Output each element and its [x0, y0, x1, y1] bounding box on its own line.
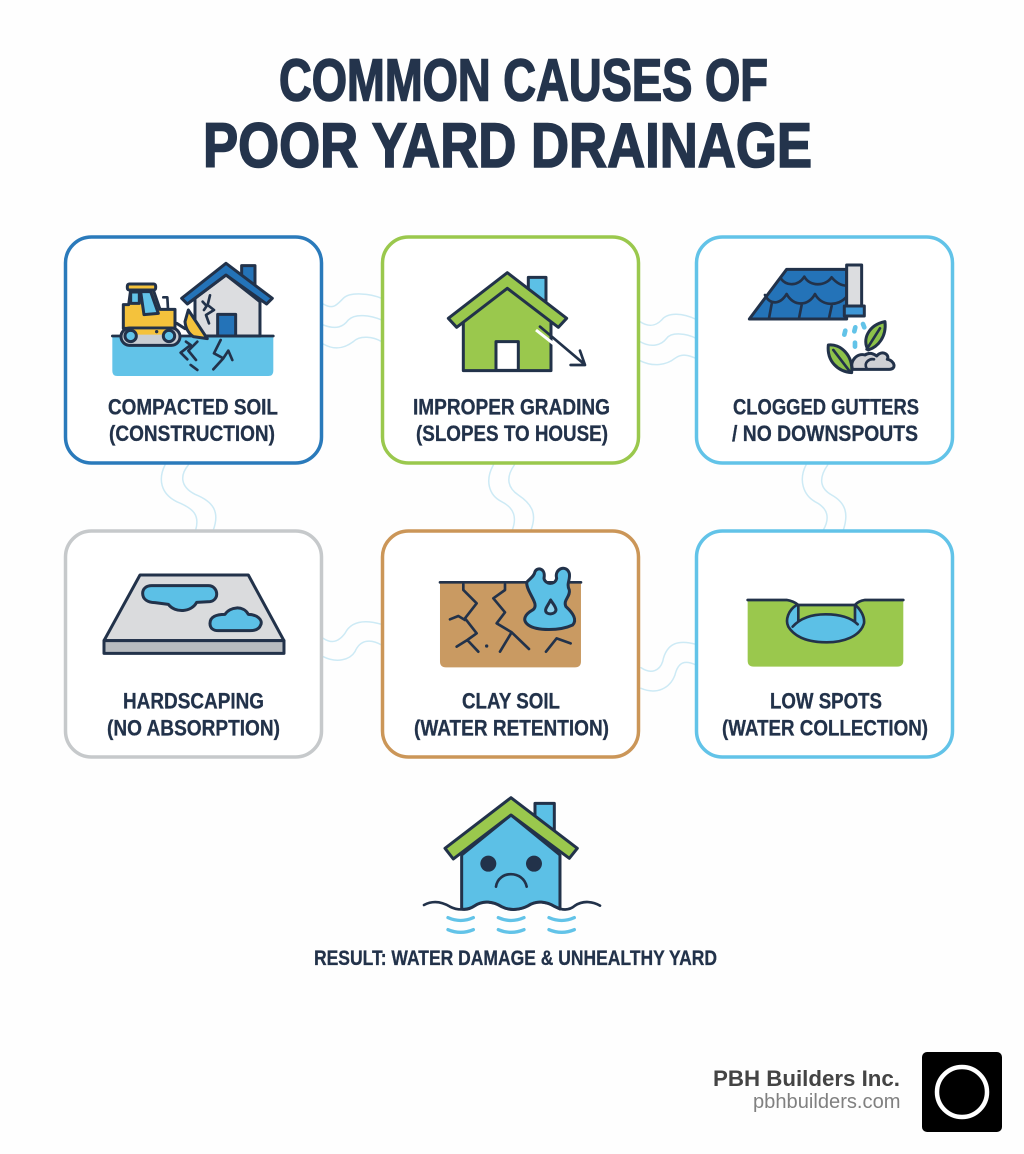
label: / NO DOWNSPOUTS: [732, 421, 918, 446]
panel: hardscaping: [66, 531, 322, 757]
label: [722, 688, 928, 740]
label: (WATER RETENTION): [414, 716, 609, 740]
label: (WATER COLLECTION): [722, 716, 928, 740]
icon: green house with slope arrow: [448, 273, 585, 371]
connector: improper grading to clogged gutters: [640, 314, 696, 365]
panel: clogged gutters: [696, 237, 952, 463]
panel: low spots: [696, 531, 952, 757]
panel: compacted soil: [66, 237, 322, 463]
label: (NO ABSORPTION): [107, 716, 280, 740]
connector: hardscaping to clay soil: [323, 622, 382, 660]
brand text: PBH Builders Inc.: [713, 1066, 900, 1091]
logo: [922, 1052, 1002, 1132]
icon: bulldozer and cracked house: [112, 263, 273, 376]
connector: clay soil to low spots: [641, 642, 696, 691]
label: (CONSTRUCTION): [109, 421, 275, 446]
icon: roof, gutter, leaves: [749, 265, 894, 373]
label: COMPACTED SOIL: [108, 394, 278, 420]
icon: paved slab with puddles: [104, 575, 284, 653]
title: COMMON CAUSES OF: [279, 48, 768, 114]
label: [732, 394, 919, 446]
title: POOR YARD DRAINAGE: [203, 111, 812, 181]
connector: vertical right: [802, 465, 846, 530]
label: [413, 394, 610, 446]
panel: clay soil: [382, 531, 638, 757]
brand text: [713, 1066, 900, 1113]
label: [414, 688, 609, 740]
icon: sad flooded house: [424, 798, 600, 932]
icon: cracked clay with water: [440, 568, 581, 667]
connector: compacted soil to improper grading: [323, 294, 382, 348]
label: LOW SPOTS: [770, 688, 882, 714]
label: CLOGGED GUTTERS: [733, 394, 919, 420]
connector: vertical middle: [489, 465, 534, 530]
panel: improper grading: [382, 237, 638, 463]
title: [203, 48, 812, 181]
connector: vertical left: [161, 465, 216, 530]
icon: depression with pooled water: [748, 600, 903, 667]
label: HARDSCAPING: [123, 688, 264, 714]
label: CLAY SOIL: [462, 688, 560, 714]
label: IMPROPER GRADING: [413, 394, 610, 420]
label: (SLOPES TO HOUSE): [416, 421, 608, 446]
label: [107, 688, 280, 740]
brand text: pbhbuilders.com: [753, 1091, 900, 1113]
label: [108, 394, 278, 446]
result caption: RESULT: WATER DAMAGE & UNHEALTHY YARD: [314, 947, 717, 970]
